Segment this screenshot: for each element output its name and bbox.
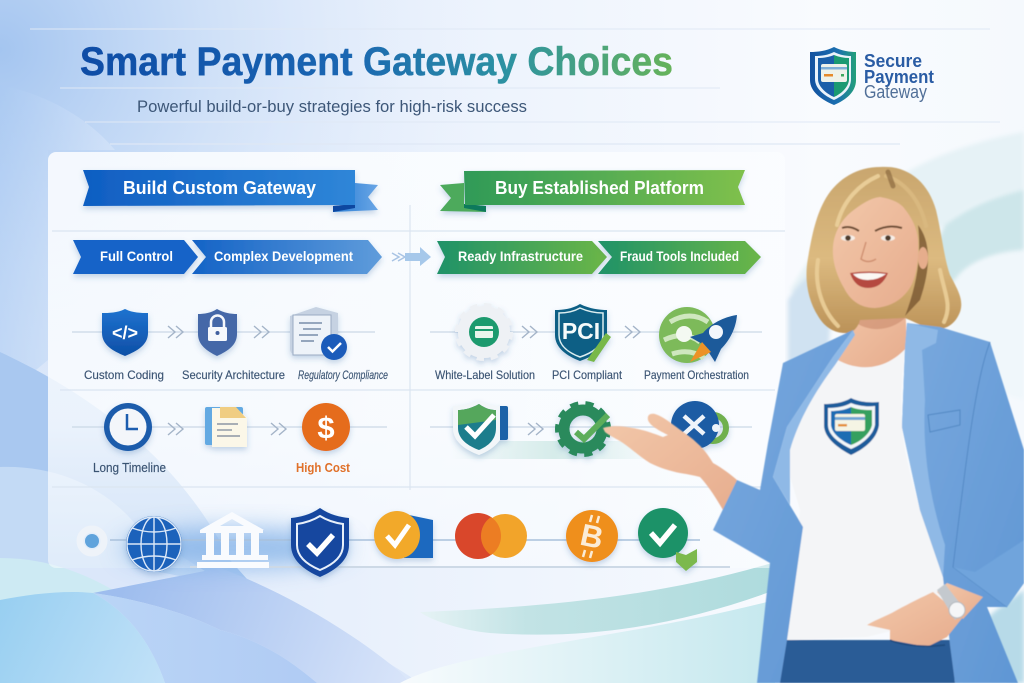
right side waves xyxy=(788,132,1024,683)
icon: card circles xyxy=(455,513,527,559)
left lapel shading xyxy=(773,330,855,505)
wristwatch xyxy=(937,584,965,620)
icon: custom coding shield xyxy=(102,309,148,356)
small chevrons between icons xyxy=(168,326,640,435)
connector lines xyxy=(72,332,762,427)
title: Smart Payment Gateway Choices xyxy=(80,40,673,84)
hand in pocket xyxy=(867,592,963,647)
hair strands xyxy=(817,172,948,326)
chevron: full control xyxy=(73,240,198,274)
icon: paper document xyxy=(205,407,247,447)
header rule lines xyxy=(30,29,1000,144)
ribbon: buy established platform: Buy Established Platform xyxy=(495,178,704,198)
icon: regulatory document with check xyxy=(290,307,347,360)
icon: green gear with check xyxy=(558,404,608,454)
smile xyxy=(850,272,888,288)
icon: clock xyxy=(104,403,152,451)
label: payment orchestration: Payment Orchestration xyxy=(644,368,749,382)
right lapel shading xyxy=(902,323,945,577)
label: PCI compliant: PCI Compliant xyxy=(552,368,623,382)
dividers xyxy=(52,205,785,490)
label: regulatory compliance: Regulatory Compliance xyxy=(298,368,388,382)
chevron: complex development: Complex Development xyxy=(214,249,353,264)
icon row: payment partners xyxy=(80,508,697,577)
logo: secure payment gateway xyxy=(810,47,934,105)
icon: globe xyxy=(126,516,182,572)
neck xyxy=(833,295,907,367)
chevron: full control: Full Control xyxy=(100,249,173,264)
face xyxy=(833,197,918,308)
icon: PCI shield xyxy=(555,304,611,362)
icon: PCI shield: PCI xyxy=(562,318,600,344)
label: custom coding: Custom Coding xyxy=(84,368,164,382)
icon: high cost dollar: $ xyxy=(317,410,335,445)
presenter figure xyxy=(603,167,1024,683)
pocket flap xyxy=(928,410,960,432)
label: long timeline: Long Timeline xyxy=(93,461,166,475)
logo wordmark: Payment xyxy=(864,67,934,87)
chevron: complex development xyxy=(192,240,382,274)
jeans xyxy=(776,640,955,683)
icon: small gear xyxy=(80,529,104,553)
shirt logo xyxy=(824,398,879,455)
blue glow behind bottom row xyxy=(120,528,350,568)
jeans pocket xyxy=(890,640,945,646)
rolled sleeve cuff xyxy=(953,540,1024,607)
icon: security lock shield xyxy=(198,309,237,356)
logo wordmark xyxy=(864,51,934,102)
icon: white-label gear xyxy=(458,306,510,358)
icon: bitcoin xyxy=(566,510,618,562)
ribbon: buy established platform xyxy=(440,170,745,212)
label: security architecture: Security Architecture xyxy=(182,368,285,382)
icon: logo shield xyxy=(810,47,856,105)
back hair xyxy=(806,167,961,333)
icon: green check shield xyxy=(638,508,697,571)
subtitle: Powerful build-or-buy strategies for high-risk success xyxy=(137,98,527,116)
forearm and hand xyxy=(603,414,737,522)
chevron: ready infrastructure xyxy=(437,241,607,274)
row 2 soft shelf xyxy=(450,441,660,459)
sleeve seam xyxy=(953,342,1007,607)
icon: custom coding shield: </> xyxy=(112,323,138,343)
ribbon: build custom gateway xyxy=(83,170,378,212)
logo wordmark: Secure xyxy=(864,51,922,71)
chevron: fraud tools included: Fraud Tools Included xyxy=(620,249,739,264)
label: high cost: High Cost xyxy=(296,461,351,475)
t-shirt xyxy=(785,345,950,640)
chevron: ready infrastructure: Ready Infrastructure xyxy=(458,249,583,264)
panel: comparison board xyxy=(48,152,785,568)
jacket left side xyxy=(713,330,853,683)
arrow: between build and buy xyxy=(392,247,431,266)
icon: orchestration globe and rocket xyxy=(659,307,737,363)
teeth xyxy=(853,273,886,280)
icon: blue shield check xyxy=(291,508,349,577)
label: white-label solution: White-Label Solution xyxy=(435,368,535,382)
right forearm xyxy=(937,583,983,619)
ear xyxy=(918,247,928,269)
chevron: fraud tools included xyxy=(598,241,761,274)
eyes and brows xyxy=(841,227,902,262)
hair shadow by neck and ear xyxy=(905,225,928,316)
icon: green shield with arrow xyxy=(453,400,508,455)
bottom strip line xyxy=(110,540,730,568)
neck shadow xyxy=(855,300,905,329)
logo wordmark: Gateway xyxy=(864,82,927,102)
icon: bank xyxy=(197,512,269,568)
icon: bitcoin: B xyxy=(577,517,606,556)
jacket right side xyxy=(902,323,1024,683)
icon: blue globe with green gear xyxy=(671,401,726,449)
ribbon: build custom gateway: Build Custom Gateway xyxy=(123,178,316,198)
icon: orange check with card xyxy=(374,511,433,559)
icon: high cost dollar xyxy=(302,403,350,451)
